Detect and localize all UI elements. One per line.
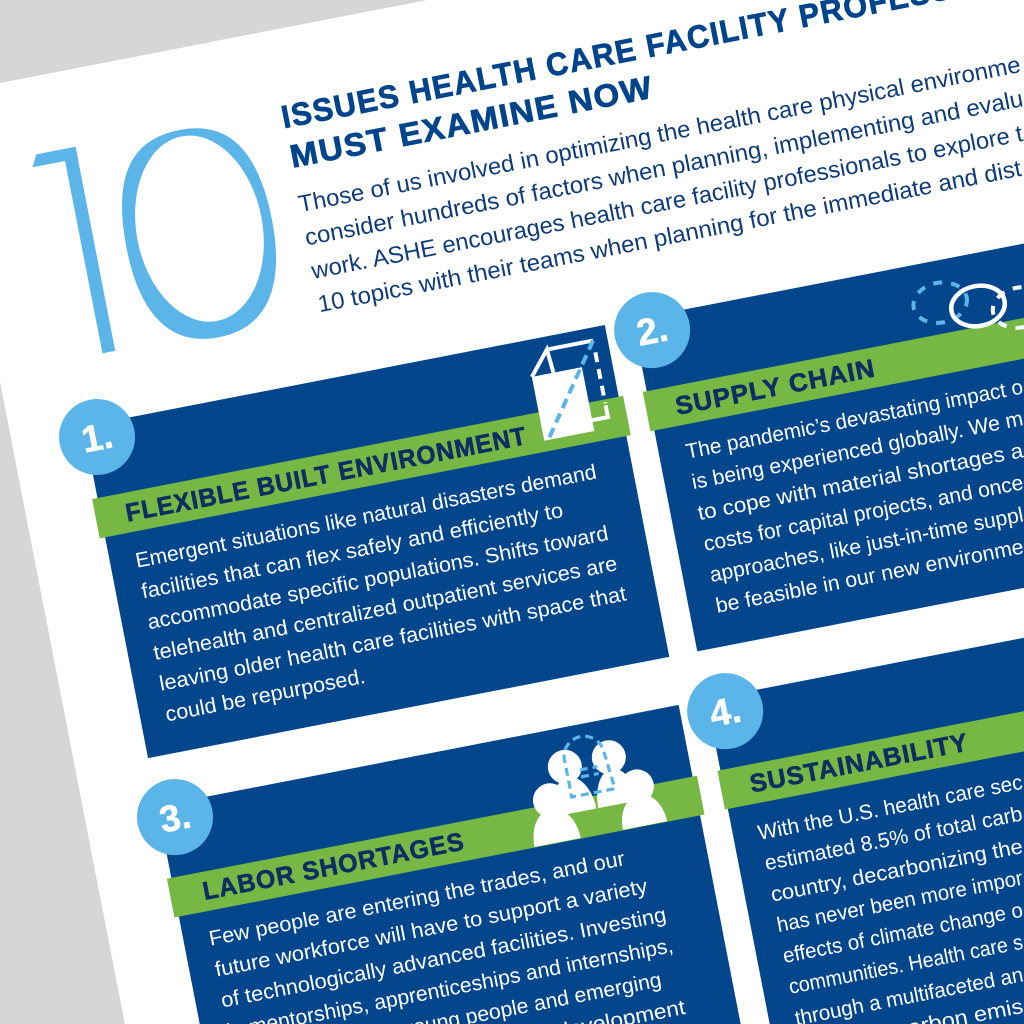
body 1: telehealth and centralized outpatient services are	[152, 552, 619, 665]
body 1	[134, 459, 634, 726]
number badge 4	[681, 667, 770, 756]
body 2: costs for capital projects, and once	[702, 471, 1024, 556]
panel 3: labor shortages	[153, 704, 778, 1024]
number badge 3: 3.	[156, 795, 194, 841]
body 4: effects of climate change o	[781, 899, 1024, 968]
icon: flexible room	[527, 341, 610, 441]
body 4: With the U.S. health care sec	[756, 771, 1024, 845]
heading 1: FLEXIBLE BUILT ENVIRONMENT	[123, 422, 529, 528]
intro paragraph: 10 topics with their teams when planning for the immediate and dist	[316, 155, 1024, 317]
body 3	[207, 841, 687, 1024]
body 3: future workforce will have to support a variety	[213, 875, 650, 982]
icon: linked chain	[910, 263, 1024, 347]
intro paragraph: consider hundreds of factors when planning, implementing and evalu	[303, 85, 1024, 250]
number badge 2	[608, 286, 697, 375]
body 3: Few people are entering the trades, and our	[207, 847, 627, 951]
body 1: accommodate specific populations. Shifts toward	[146, 522, 610, 634]
body 3: of technologically advanced facilities. Investing	[219, 903, 668, 1012]
heading 3: LABOR SHORTAGES	[200, 828, 467, 906]
title: MUST EXAMINE NOW	[287, 69, 656, 175]
intro paragraph	[295, 51, 1024, 317]
number badge 1	[52, 392, 142, 482]
body 4	[756, 771, 1024, 1024]
body 2	[684, 376, 1024, 618]
big number 10: 0	[83, 54, 316, 413]
body 2: is being experienced globally. We m	[690, 407, 1024, 494]
number badge 2: 2.	[633, 308, 671, 354]
icon: people meeting	[516, 723, 667, 847]
number badge 4: 4.	[706, 689, 744, 735]
body 1: facilities that can flex safely and efficiently to	[140, 499, 565, 603]
heading 2: SUPPLY CHAIN	[673, 355, 878, 421]
heading 4: SUSTAINABILITY	[748, 729, 971, 798]
big number 10	[32, 128, 276, 354]
panel 4: sustainability	[704, 547, 1024, 1024]
number badge 3	[130, 773, 220, 862]
body 2: be feasible in our new environme	[714, 535, 1024, 618]
intro paragraph: Those of us involved in optimizing the health care physical environme	[296, 51, 1023, 217]
body 4: country, decarbonizing the	[769, 835, 1024, 907]
body 1: could be repurposed.	[163, 665, 367, 726]
body 2: The pandemic’s devastating impact o	[684, 376, 1024, 464]
body 4: estimated 8.5% of total carb	[763, 803, 1024, 875]
body 1: Emergent situations like natural disasters demand	[134, 461, 598, 573]
number badge 1: 1.	[78, 414, 116, 461]
panel 2: supply chain	[629, 167, 1024, 652]
body 2: approaches, like just-in-time suppl	[708, 503, 1024, 587]
body 2: to cope with material shortages a	[696, 439, 1024, 525]
body 4: has never been more impor	[775, 867, 1024, 937]
intro paragraph: work. ASHE encourages health care facility professionals to explore t	[308, 120, 1024, 284]
body 1: leaving older health care facilities with space that	[157, 582, 628, 696]
panel 1: flexible built environment	[78, 324, 674, 759]
